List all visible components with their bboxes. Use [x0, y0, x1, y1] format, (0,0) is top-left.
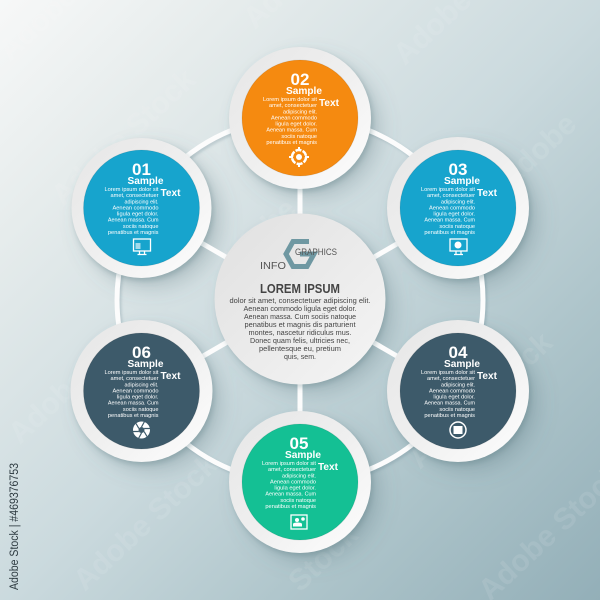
heading: Sample: [285, 449, 321, 461]
number: 04: [449, 343, 468, 362]
panel 06: [70, 320, 214, 465]
body text: sociis natoque: [123, 224, 158, 230]
hub body text: montes, nascetur ridiculus mus.: [248, 330, 352, 337]
heading: Text: [477, 187, 497, 199]
number: 06: [132, 343, 151, 362]
heading: Sample: [128, 358, 164, 370]
panel 04: [387, 320, 531, 465]
number: 01: [132, 160, 151, 179]
body text: Lorem ipsum dolor sit: [421, 370, 475, 376]
soft cast shadows: [81, 58, 538, 562]
body text: ligula eget dolor.: [117, 212, 159, 218]
heading: [286, 85, 339, 109]
body text: adipiscing elit.: [282, 473, 316, 479]
body text: amet, consectetuer: [269, 103, 317, 109]
body text: Aenean massa. Cum: [266, 128, 317, 134]
icon: badge: [450, 422, 466, 438]
icon: aperture: [133, 422, 150, 438]
hub body text: Donec quam felis, ultricies nec,: [250, 338, 350, 345]
body text: [421, 370, 475, 419]
body text: sociis natoque: [281, 134, 317, 140]
hub body text: pellentesque eu, pretium: [259, 346, 341, 353]
body text: Lorem ipsum dolor sit: [421, 187, 475, 193]
heading: [128, 175, 181, 199]
body text: Lorem ipsum dolor sit: [104, 370, 159, 376]
body text: sociis natoque: [280, 498, 316, 504]
watermarks: Stock: [282, 518, 365, 598]
watermarks: Adobe Stock: [45, 63, 202, 212]
body text: [262, 461, 316, 510]
body text: Aenean commodo: [270, 479, 316, 485]
body text: ligula eget dolor.: [117, 394, 159, 400]
icon: target: [289, 147, 309, 167]
heading: Text: [160, 187, 181, 199]
body text: Aenean massa. Cum: [108, 401, 159, 407]
hub heading: LOREM IPSUM: [260, 281, 340, 296]
body text: Aenean massa. Cum: [424, 401, 475, 407]
watermarks: Adobe: [2, 362, 93, 450]
hub body text: [230, 298, 371, 361]
heading: [444, 358, 497, 382]
body text: Aenean massa. Cum: [265, 492, 316, 498]
body text: Aenean commodo: [429, 205, 475, 211]
hub body text: penatibus et magnis dis parturient: [244, 322, 356, 329]
hub body text: dolor sit amet, consectetuer adipiscing elit.: [230, 298, 371, 305]
panel 03: [387, 137, 531, 282]
body text: penatibus et magnis: [266, 140, 317, 146]
watermarks: Adobe: [212, 192, 303, 280]
body text: sociis natoque: [123, 407, 158, 413]
heading: Text: [160, 370, 181, 382]
heading: [128, 358, 181, 382]
body text: [104, 370, 159, 419]
body text: adipiscing elit.: [124, 382, 159, 388]
body text: Aenean commodo: [112, 205, 158, 211]
central hub panel: [214, 214, 387, 387]
body text: ligula eget dolor.: [433, 394, 475, 400]
body text: Lorem ipsum dolor sit: [104, 187, 159, 193]
heading: Sample: [444, 358, 480, 370]
body text: [263, 97, 317, 146]
heading: Text: [318, 461, 338, 473]
stock id caption: Adobe Stock | #469376753: [9, 463, 21, 590]
icon: monitor with chart: [450, 239, 467, 254]
body text: [421, 187, 475, 236]
body text: Lorem ipsum dolor sit: [262, 461, 316, 467]
body text: adipiscing elit.: [124, 199, 159, 205]
body text: amet, consectetuer: [427, 193, 475, 199]
body text: amet, consectetuer: [268, 467, 316, 473]
hub body text: Aenean massa. Cum sociis natoque: [244, 314, 356, 321]
hub body text: quis, sem.: [284, 354, 316, 361]
body text: Aenean commodo: [112, 388, 158, 394]
hub body text: Aenean commodo ligula eget dolor.: [244, 306, 357, 313]
connector ring and spokes: [117, 117, 485, 485]
body text: adipiscing elit.: [283, 109, 317, 115]
body text: Lorem ipsum dolor sit: [263, 97, 317, 103]
icon: picture frame: [291, 515, 307, 529]
heading: Sample: [286, 85, 322, 97]
body text: sociis natoque: [439, 407, 475, 413]
body text: ligula eget dolor.: [433, 212, 475, 218]
body text: ligula eget dolor.: [274, 486, 316, 492]
body text: adipiscing elit.: [441, 382, 475, 388]
heading: Sample: [444, 175, 480, 187]
heading: Text: [319, 97, 339, 109]
body text: penatibus et magnis: [265, 504, 316, 510]
body text: amet, consectetuer: [110, 376, 159, 382]
body text: sociis natoque: [439, 224, 475, 230]
watermarks: Adobe: [492, 107, 583, 195]
body text: penatibus et magnis: [108, 230, 159, 236]
panel 02: [229, 47, 373, 192]
body text: Aenean massa. Cum: [108, 218, 159, 224]
number: 03: [449, 160, 467, 179]
heading: [444, 175, 497, 199]
heading: Sample: [128, 175, 164, 187]
heading: [285, 449, 338, 473]
body text: penatibus et magnis: [108, 413, 159, 419]
body text: adipiscing elit.: [441, 199, 475, 205]
number: 02: [291, 70, 309, 89]
heading: Text: [477, 370, 497, 382]
panel 01: [72, 138, 214, 281]
panel 05: [229, 411, 373, 556]
body text: Aenean massa. Cum: [424, 218, 475, 224]
icon: monitor: [134, 239, 150, 254]
body text: [104, 187, 159, 236]
body text: Aenean commodo: [429, 388, 475, 394]
body text: amet, consectetuer: [110, 193, 159, 199]
logo word GRAPHICS: GRAPHICS: [295, 247, 337, 257]
watermarks: Adobe Stock: [402, 326, 559, 475]
body text: Aenean commodo: [271, 115, 317, 121]
logo word INFO: INFO: [260, 261, 286, 272]
logo: hexagon G: [286, 242, 314, 266]
number: 05: [290, 434, 308, 453]
body text: penatibus et magnis: [424, 413, 475, 419]
body text: penatibus et magnis: [424, 230, 475, 236]
body text: ligula eget dolor.: [275, 122, 317, 128]
body text: amet, consectetuer: [427, 376, 475, 382]
watermarks: Adobe Stock: [67, 448, 224, 597]
